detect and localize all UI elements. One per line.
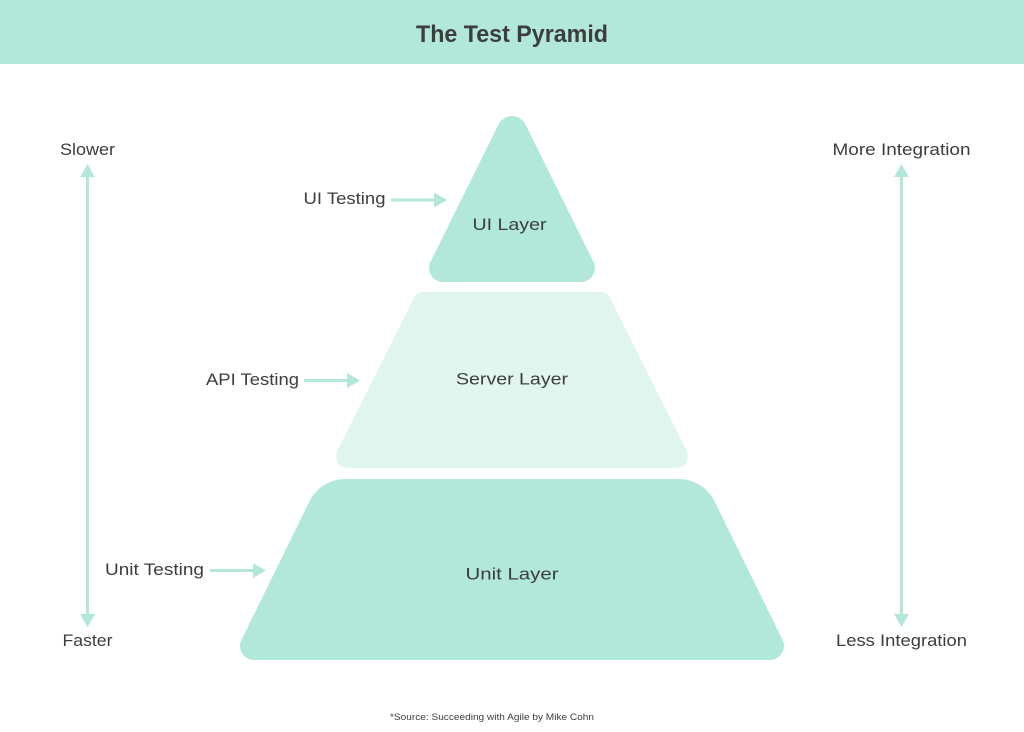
pyramid: UI layer: UI Layer bbox=[472, 215, 547, 234]
callout: unit testing bbox=[105, 561, 266, 579]
right axis: integration: Less Integration bbox=[836, 632, 967, 650]
callout: unit testing: Unit Testing bbox=[105, 561, 204, 579]
pyramid: server layer bbox=[336, 292, 688, 468]
pyramid: unit layer bbox=[240, 479, 784, 660]
arrow: more to less integration bbox=[894, 164, 909, 627]
pyramid: server layer: Server Layer bbox=[456, 370, 568, 388]
arrow: API testing bbox=[304, 373, 360, 388]
arrow: slower to faster bbox=[80, 164, 95, 627]
pyramid: UI layer bbox=[429, 116, 595, 282]
callout: API testing: API Testing bbox=[206, 371, 299, 389]
left axis: speed bbox=[60, 141, 116, 650]
pyramid: unit layer: Unit Layer bbox=[466, 564, 559, 584]
title banner bbox=[0, 0, 1024, 64]
arrow: UI testing bbox=[391, 192, 447, 208]
source note: *Source: Succeeding with Agile by Mike Cohn bbox=[390, 712, 594, 723]
title: The Test Pyramid bbox=[416, 21, 608, 48]
callout: UI testing: UI Testing bbox=[304, 190, 386, 208]
right axis: integration: More Integration bbox=[832, 141, 970, 159]
callout: API testing bbox=[206, 371, 360, 389]
callout: UI testing bbox=[304, 190, 447, 208]
arrow: unit testing bbox=[210, 563, 266, 578]
left axis: speed: Slower bbox=[60, 141, 116, 159]
left axis: speed: Faster bbox=[62, 632, 113, 650]
right axis: integration bbox=[832, 141, 970, 650]
